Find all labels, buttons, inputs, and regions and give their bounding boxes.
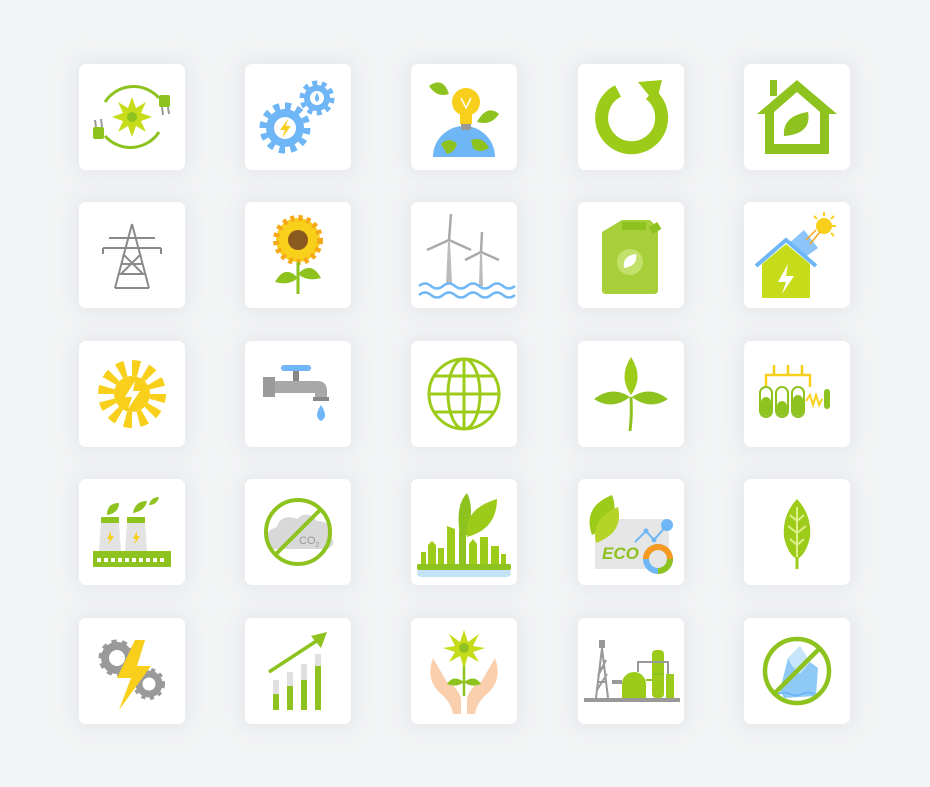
icon: hands flower <box>411 618 517 724</box>
icon: no CO2: 2 <box>316 542 320 549</box>
icon: jerry can <box>578 202 684 308</box>
icon: no ice <box>744 618 850 724</box>
icon: solar house <box>744 202 850 308</box>
icon: plug cycle flower <box>79 64 185 170</box>
icon: sunflower <box>245 202 351 308</box>
icon: globe bulb <box>411 64 517 170</box>
icon: sun lightning <box>79 341 185 447</box>
icon: test tubes <box>744 341 850 447</box>
icon: gray gears lightning <box>79 618 185 724</box>
icon: leaf <box>744 479 850 585</box>
icon: green house leaf <box>744 64 850 170</box>
icon: refresh arrow <box>578 64 684 170</box>
icon: faucet drop <box>245 341 351 447</box>
icon: wind turbines <box>411 202 517 308</box>
icon: no CO2 <box>245 479 351 585</box>
icon: green city <box>411 479 517 585</box>
icon: eco chart: ECO <box>602 544 639 563</box>
icon: growth bar chart <box>245 618 351 724</box>
icon: sprout <box>578 341 684 447</box>
icon: pylon <box>79 202 185 308</box>
icon: oil refinery <box>578 618 684 724</box>
icon: no CO2: CO <box>299 535 316 547</box>
icon: globe lines <box>411 341 517 447</box>
icon: factory <box>79 479 185 585</box>
icon: blue gears <box>245 64 351 170</box>
icon: eco chart <box>578 479 684 585</box>
